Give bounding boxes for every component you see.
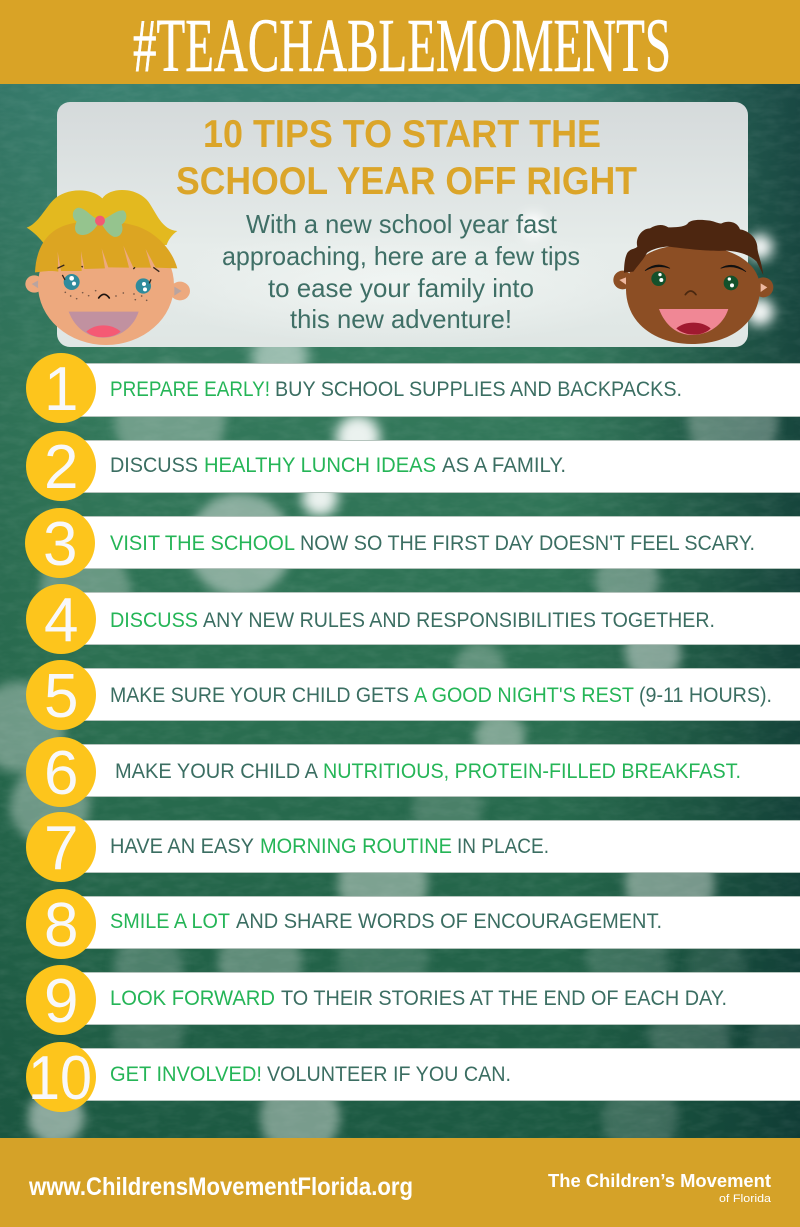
tip 4 text: ANY NEW RULES AND RESPONSIBILITIES TOGETHER. (203, 609, 715, 632)
tip 5 number: 5 (44, 662, 78, 731)
tip 2 text (110, 454, 566, 477)
tip 6 number (26, 737, 96, 808)
tip 2 number (26, 431, 96, 502)
tip 7 text: MORNING ROUTINE (260, 835, 452, 858)
tip 3 text: VISIT THE SCHOOL (110, 532, 295, 555)
panel: intro (57, 102, 748, 347)
tip 7 number (26, 812, 96, 883)
icon: girl face (25, 190, 190, 345)
tip 10 text: VOLUNTEER IF YOU CAN. (267, 1063, 511, 1086)
tip 7 text (110, 835, 549, 858)
tip 9 (26, 965, 800, 1036)
tip 5 text: A GOOD NIGHT'S REST (414, 684, 634, 707)
header band with title (0, 0, 800, 88)
tip 7 (26, 812, 800, 883)
tip 10 (26, 1042, 800, 1113)
tip 4 text: DISCUSS (110, 609, 198, 632)
tip 8 text: AND SHARE WORDS OF ENCOURAGEMENT. (236, 910, 662, 933)
tip 6 text: MAKE YOUR CHILD A (115, 760, 318, 783)
website url: www.ChildrensMovementFlorida.org (28, 1173, 413, 1201)
tip 7 text: HAVE AN EASY (110, 835, 254, 858)
tip 5 (26, 660, 800, 731)
tip 1 text (110, 378, 682, 401)
tip 3 text: NOW SO THE FIRST DAY DOESN'T FEEL SCARY. (300, 532, 755, 555)
tip 8 (26, 889, 800, 960)
tip 2 (26, 431, 800, 502)
tip 6 text (115, 760, 741, 783)
logo: The Children's Movement of Florida: of Florida (719, 1193, 772, 1205)
icon: boy face (613, 220, 773, 344)
intro text: to ease your family into (268, 273, 534, 303)
tip 6 number: 6 (44, 739, 78, 808)
tip 1 number (26, 353, 96, 424)
tip 5 text (110, 684, 772, 707)
intro text: approaching, here are a few tips (222, 241, 580, 271)
tip 7 number: 7 (44, 814, 78, 883)
heading: 10 TIPS TO START THE (203, 113, 601, 156)
intro text: With a new school year fast (246, 209, 558, 239)
intro text (222, 209, 580, 334)
tip 1 number: 1 (44, 355, 78, 424)
logo: The Children's Movement of Florida (548, 1170, 772, 1205)
tip 8 number: 8 (44, 891, 78, 960)
tip 7 text: IN PLACE. (457, 835, 549, 858)
intro text: this new adventure! (290, 304, 512, 334)
tip 3 (25, 508, 800, 579)
tip 2 number: 2 (44, 433, 78, 502)
tip 2 text: DISCUSS (110, 454, 198, 477)
logo: The Children's Movement of Florida: The Children’s Movement (548, 1170, 771, 1191)
tip 4 number (26, 584, 96, 655)
tip 1 text: BUY SCHOOL SUPPLIES AND BACKPACKS. (275, 378, 682, 401)
tip 10 text (110, 1063, 511, 1086)
tip 9 number (26, 965, 96, 1036)
tip 2 text: AS A FAMILY. (442, 454, 566, 477)
tip 5 text: (9-11 HOURS). (639, 684, 772, 707)
tip 6 text: NUTRITIOUS, PROTEIN-FILLED BREAKFAST. (323, 760, 741, 783)
tip 9 number: 9 (44, 967, 78, 1036)
tip 9 text: LOOK FORWARD (110, 987, 275, 1010)
tip 5 number (26, 660, 96, 731)
tip 3 number (25, 508, 95, 579)
tip 5 text: MAKE SURE YOUR CHILD GETS (110, 684, 409, 707)
tip 1 text: PREPARE EARLY! (110, 378, 270, 401)
heading (176, 113, 637, 203)
tip 1 (26, 353, 800, 424)
tip 3 text (110, 532, 755, 555)
heading: SCHOOL YEAR OFF RIGHT (176, 160, 637, 203)
tip 4 (26, 584, 800, 655)
tip 9 text: TO THEIR STORIES AT THE END OF EACH DAY. (281, 987, 727, 1010)
tip 8 text: SMILE A LOT (110, 910, 230, 933)
tip 2 text: HEALTHY LUNCH IDEAS (204, 454, 436, 477)
tip 8 number (26, 889, 96, 960)
tip 9 text (110, 987, 727, 1010)
tip 10 number: 10 (28, 1044, 92, 1113)
tip 4 number: 4 (44, 586, 78, 655)
tip 10 text: GET INVOLVED! (110, 1063, 262, 1086)
tip 3 number: 3 (43, 510, 77, 579)
tip 6 (26, 737, 800, 808)
footer band (0, 1138, 800, 1227)
